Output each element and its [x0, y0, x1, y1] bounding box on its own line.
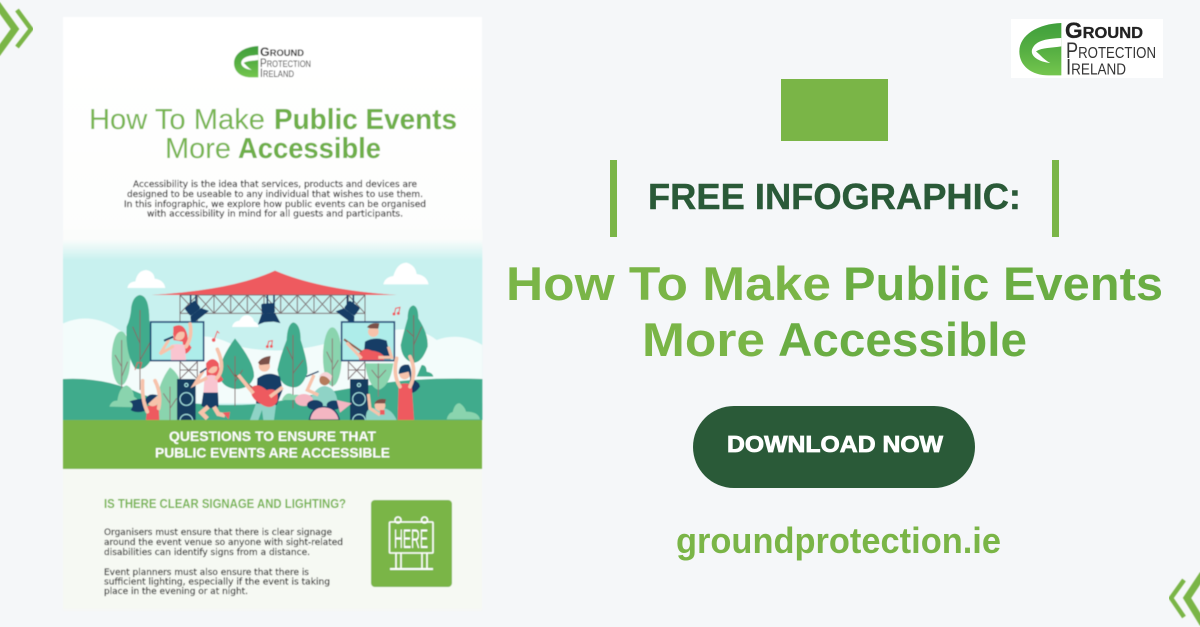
child dancing	[129, 381, 160, 420]
text block: introduction: In this infographic, we explore how public events can be organised	[124, 200, 426, 210]
logo: top right: PROTECTION	[1066, 38, 1156, 63]
heading: main title: How To Make	[506, 257, 831, 310]
white hills	[63, 319, 482, 403]
heading: infographic title: Public Events	[274, 104, 457, 136]
banner: questions heading: QUESTIONS TO ENSURE THAT	[169, 428, 376, 444]
heading: free infographic: FREE INFOGRAPHIC:	[648, 176, 1021, 217]
logo: top right	[1011, 18, 1163, 80]
heading: main title	[506, 257, 1163, 366]
heading: main title: More	[642, 313, 765, 366]
logo: top right: IRELAND	[1066, 54, 1126, 80]
stage canopy	[152, 271, 397, 295]
text block: signage body: place in the evening or at night.	[104, 587, 248, 597]
icon: here sign: HERE	[394, 524, 428, 554]
boy with phone	[366, 394, 397, 420]
panel: signage section	[63, 469, 482, 612]
decorative block	[781, 79, 888, 141]
icon: chevrons bottom right	[1171, 574, 1200, 624]
heading: infographic title	[89, 104, 457, 165]
guitarist	[235, 356, 283, 420]
music notes	[135, 307, 400, 370]
panel: infographic preview	[63, 17, 482, 612]
button: download now	[693, 406, 975, 488]
text block: signage body: disabilities can identify signs from a distance.	[104, 548, 310, 558]
text block: signage body: sufficient lighting, especially if the event is taking	[104, 578, 330, 588]
illustration: outdoor concert stage	[63, 230, 482, 427]
stage truss	[180, 295, 365, 380]
singer	[195, 349, 230, 419]
heading: infographic title: How To Make	[89, 104, 265, 136]
banner: questions heading: PUBLIC EVENTS ARE ACCESSIBLE	[155, 444, 390, 460]
logo: infographic header	[234, 45, 311, 80]
icon: chevrons top left	[0, 4, 31, 54]
heading: infographic title: Accessible	[238, 133, 381, 165]
banner: questions heading	[63, 420, 482, 469]
logo: infographic header: GROUND	[260, 45, 305, 59]
woman dancing	[395, 357, 420, 420]
heading: free infographic	[610, 160, 1059, 237]
clouds	[127, 263, 429, 327]
green hills	[63, 379, 482, 420]
left screen	[151, 322, 204, 361]
logo: top right: GROUND	[1065, 18, 1143, 43]
text block: signage body: around the event venue so anyone with sight-related	[104, 538, 343, 548]
logo: infographic header: PROTECTION	[260, 56, 311, 70]
stage lights	[181, 295, 364, 325]
right screen	[342, 322, 394, 361]
trees and bushes	[109, 295, 480, 420]
text block: introduction	[124, 180, 426, 220]
text block: signage body: Organisers must ensure that there is clear signage	[104, 528, 332, 538]
button: download now: DOWNLOAD NOW	[727, 431, 943, 457]
heading: signage question: IS THERE CLEAR SIGNAGE AND LIGHTING?	[104, 497, 346, 511]
speakers	[177, 379, 368, 427]
heading: main title: Public Events	[843, 257, 1163, 310]
heading: main title: Accessible	[778, 313, 1027, 366]
text block: signage body	[104, 528, 343, 597]
icon: here sign	[371, 500, 452, 587]
text block: introduction: with accessibility in mind for all guests and participants.	[147, 210, 403, 220]
text block: signage body: Event planners must also ensure that there is	[104, 568, 309, 578]
drummer	[295, 371, 352, 420]
heading: infographic title: More	[165, 133, 231, 165]
text block: introduction: Accessibility is the idea that services, products and devices are	[133, 180, 417, 190]
text: website: groundprotection.ie	[676, 520, 1001, 561]
logo: infographic header: IRELAND	[260, 66, 294, 80]
text block: introduction: designed to be useable to any individual that wishes to use them.	[127, 190, 423, 200]
